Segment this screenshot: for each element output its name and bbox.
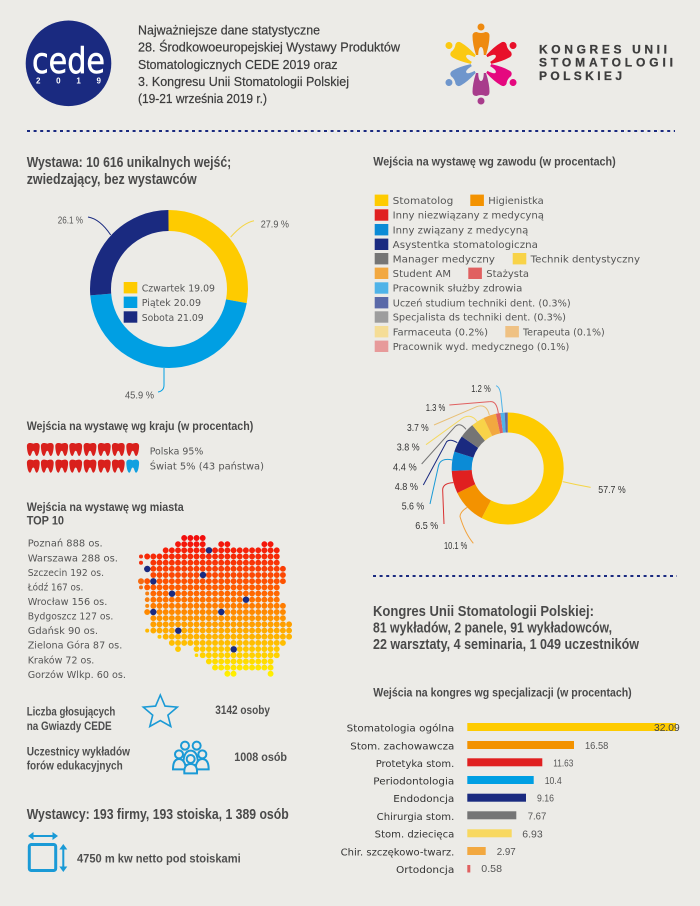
text: floor area: 4750 m kw netto pod stoiskami xyxy=(77,853,241,865)
logo text: Kongres Unii Stomatologii Polskiej: POLSKIEJ xyxy=(539,69,622,83)
header text: Stomatologicznych CEDE 2019 oraz xyxy=(138,58,338,72)
icon: people group xyxy=(173,742,209,773)
heading: Kongres xyxy=(373,604,640,653)
logo text: Kongres Unii Stomatologii Polskiej: STOMATOLOGII xyxy=(539,56,673,70)
legend: professions xyxy=(375,195,640,353)
bar values: 10.4 xyxy=(545,775,562,787)
header text: (19-21 września 2019 r.) xyxy=(138,92,267,106)
header text: Najważniejsze dane statystyczne xyxy=(138,24,320,38)
text: votes: Liczba głosujących xyxy=(27,707,115,719)
heading: specjalizacje: Wejścia na kongres wg specjalizacji (w procentach) xyxy=(373,688,632,700)
header text: 3. Kongresu Unii Stomatologii Polskiej xyxy=(138,75,349,89)
legend: professions: Pracownik służby zdrowia xyxy=(393,284,522,295)
bar labels: Stomatologia ogólna xyxy=(347,722,454,734)
list: top 10 cities: Gdańsk 90 os. xyxy=(28,625,98,637)
legend: professions: Stomatolog xyxy=(393,196,453,207)
percentage labels: 1.3 % xyxy=(426,402,445,414)
icon: star xyxy=(143,695,177,726)
bar labels: Stom. zachowawcza xyxy=(350,742,454,752)
legend: professions: Asystentka stomatologiczna xyxy=(393,240,538,251)
list: top 10 cities: Szczecin 192 os. xyxy=(28,568,104,579)
legend: professions: Technik dentystyczny xyxy=(530,254,640,265)
percentage labels: 1.2 % xyxy=(471,383,491,395)
logo: CEDE 2019 xyxy=(26,20,111,106)
legend: professions: Farmaceuta (0.2%) xyxy=(393,327,488,338)
heading: Wystawa: Wystawa: 10 616 unikalnych wejść; xyxy=(27,155,231,171)
legend: professions: Terapeuta (0.1%) xyxy=(522,327,605,338)
donut chart: days: 27.9 % xyxy=(261,219,289,231)
bar values: 2.97 xyxy=(497,846,516,858)
legend: professions: Inny niezwiązany z medycyną xyxy=(393,211,544,222)
value: lecture participants: 1008 osób xyxy=(234,752,287,764)
bar labels: Ortodoncja xyxy=(396,865,454,876)
text: votes xyxy=(27,707,115,733)
donut chart: days xyxy=(58,215,289,402)
list: top 10 cities: Kraków 72 os. xyxy=(28,654,94,666)
bar values xyxy=(481,722,680,875)
bar labels: Endodoncja xyxy=(393,794,454,805)
list: top 10 cities: Bydgoszcz 127 os. xyxy=(28,612,113,623)
map: Poland dot grid xyxy=(138,538,290,674)
heading: miasta xyxy=(27,502,184,528)
percentage labels: 3.8 % xyxy=(397,442,420,454)
donut chart: professions xyxy=(393,383,626,552)
logo: Kongres Unii Stomatologii Polskiej teeth xyxy=(442,24,520,104)
legend: professions: Uczeń studium techniki dent. (0.3%) xyxy=(393,297,571,309)
heading: Wystawcy: Wystawcy: 193 firmy, 193 stoiska, 1 389 osób xyxy=(27,807,289,823)
text: lecture participants xyxy=(27,746,130,773)
text: votes: na Gwiazdy CEDE xyxy=(27,721,112,733)
list: top 10 cities: Łódź 167 os. xyxy=(27,581,83,593)
legend: professions: Student AM xyxy=(393,269,451,280)
text: lecture participants: Uczestnicy wykładów xyxy=(27,746,130,758)
percentage labels: 4.4 % xyxy=(393,462,417,474)
logo text: Kongres Unii Stomatologii Polskiej xyxy=(539,42,673,83)
donut chart: days: 45.9 % xyxy=(125,390,154,402)
list: top 10 cities: Wrocław 156 os. xyxy=(28,597,107,608)
heading: Wystawa: zwiedzający, bez wystawców xyxy=(27,172,197,188)
bar labels: Protetyka stom. xyxy=(376,759,454,770)
heading: zawód: Wejścia na wystawę wg zawodu (w procentach) xyxy=(373,157,616,169)
leader lines xyxy=(422,386,591,543)
map: city markers xyxy=(144,547,249,652)
donut chart: days: 26.1 % xyxy=(58,215,83,227)
heading: Wystawa xyxy=(27,155,231,188)
header text: 28. Środkowoeuropejskiej Wystawy Produktów xyxy=(138,40,401,54)
map: smaller edge dots xyxy=(138,554,198,657)
legend: professions: Higienistka xyxy=(488,196,544,207)
logo text: Kongres Unii Stomatologii Polskiej: KONGRES UNII xyxy=(539,42,667,56)
list: top 10 cities: Poznań 888 os. xyxy=(28,538,103,550)
bar values: 7.67 xyxy=(528,810,546,822)
donut legend: Czwartek 19.09 xyxy=(142,284,215,294)
heading: Kongres: 22 warsztaty, 4 seminaria, 1 049 uczestników xyxy=(373,637,640,653)
list: top 10 cities xyxy=(27,538,126,681)
text: countries: Polska 95% xyxy=(150,447,203,458)
list: top 10 cities: Zielona Góra 87 os. xyxy=(28,640,122,652)
bar values: 32.09 xyxy=(654,722,680,734)
logo: CEDE 2019: cede xyxy=(32,41,105,82)
legend: professions: Inny związany z medycyną xyxy=(393,225,528,236)
list: top 10 cities: Gorzów Wlkp. 60 os. xyxy=(28,669,126,681)
bar labels: Chir. szczękowo-twarz. xyxy=(341,848,454,858)
percentage labels: 10.1 % xyxy=(444,540,467,552)
bar values: 9.16 xyxy=(537,793,554,805)
percentage labels: 57.7 % xyxy=(598,484,626,496)
heading: miasta: Wejścia na wystawę wg miasta xyxy=(27,502,184,514)
donut legend xyxy=(124,282,215,324)
bar values: 16.58 xyxy=(585,740,608,752)
bar labels: Periodontologia xyxy=(373,776,454,788)
legend: professions: Manager medyczny xyxy=(393,254,495,265)
bar labels: Stom. dziecięca xyxy=(375,830,454,840)
percentage labels: 5.6 % xyxy=(402,500,424,512)
list: top 10 cities: Warszawa 288 os. xyxy=(28,553,118,564)
heading: kraj: Wejścia na wystawę wg kraju (w procentach) xyxy=(27,421,253,433)
donut legend: Piątek 20.09 xyxy=(142,298,201,309)
percentage labels: 3.7 % xyxy=(407,422,429,434)
percentage labels xyxy=(393,383,626,552)
text: countries xyxy=(150,447,264,472)
bar chart: specializations xyxy=(341,722,680,876)
icons: teeth 95% / 5% xyxy=(27,443,139,473)
heading: miasta: TOP 10 xyxy=(27,516,64,528)
value: votes: 3142 osoby xyxy=(215,705,271,717)
bar labels xyxy=(341,722,454,876)
legend: professions: Pracownik wyd. medycznego (0.1%) xyxy=(393,342,569,353)
bar labels: Chirurgia stom. xyxy=(377,812,454,823)
legend: professions: Stażysta xyxy=(486,269,529,280)
bar values: 6.93 xyxy=(522,828,543,840)
bar values: 0.58 xyxy=(481,863,502,875)
heading: Kongres: Kongres Unii Stomatologii Polskiej: xyxy=(373,604,594,620)
icon: floor area xyxy=(28,832,67,872)
percentage labels: 6.5 % xyxy=(415,520,438,532)
legend: professions: Specjalista ds techniki dent. (0.3%) xyxy=(393,313,566,324)
text: lecture participants: forów edukacyjnych xyxy=(27,761,123,773)
donut legend: Sobota 21.09 xyxy=(142,313,204,324)
bar values: 11.63 xyxy=(553,757,573,769)
text: countries: Świat 5% (43 państwa) xyxy=(150,459,264,472)
heading: Kongres: 81 wykładów, 2 panele, 91 wykładowców, xyxy=(373,620,612,636)
header text xyxy=(138,24,401,106)
percentage labels: 4.8 % xyxy=(395,481,418,493)
logo: CEDE 2019: 2019 xyxy=(36,76,102,85)
